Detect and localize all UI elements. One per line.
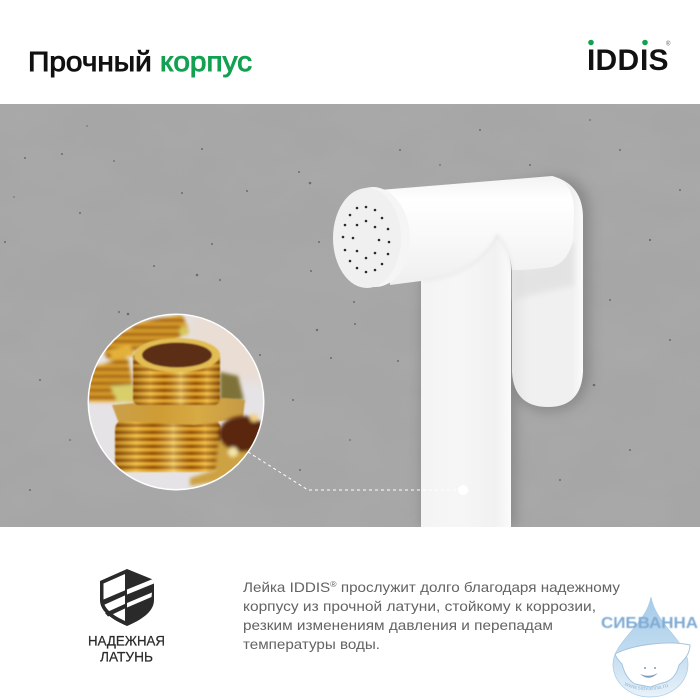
plate shade under head (511, 247, 573, 300)
hex nut (112, 398, 245, 425)
brass fitting inset (85, 310, 270, 495)
icon caption (88, 632, 165, 664)
icon: shield (100, 569, 154, 626)
lower thread (115, 418, 221, 472)
cylinder head (380, 176, 574, 285)
watermark: СИБВАННА (601, 597, 698, 698)
description text: прослужит долго благодаря надежному (337, 579, 620, 595)
pipe rim (134, 338, 220, 372)
description text: Лейка IDDIS (243, 579, 323, 595)
concrete wall photo (0, 104, 700, 527)
title: Прочный корпус (28, 46, 252, 77)
icon caption: НАДЕЖНАЯ (88, 632, 165, 648)
description text: резким изменениям давления и перепадам (243, 617, 553, 633)
upper thread (133, 352, 220, 405)
water drop (613, 597, 688, 697)
logo: IDDIS: IDDIS (587, 44, 669, 77)
product shadow (421, 176, 590, 527)
description text: ® (330, 580, 337, 589)
header band (0, 0, 700, 104)
spray holes (342, 206, 390, 273)
product: white hygienic shower (333, 176, 583, 527)
wall plate (512, 176, 583, 407)
description text: температуры воды. (243, 636, 380, 652)
handle stem (421, 234, 511, 527)
icon caption: ЛАТУНЬ (100, 648, 153, 664)
description text: корпусу из прочной латуни, стойкому к коррозии, (243, 598, 596, 614)
logo: IDDIS: ® (666, 40, 671, 48)
head underside seam (510, 260, 512, 271)
watermark url: www.sibvanna.ru (624, 682, 668, 690)
callout dot (458, 485, 468, 495)
pipe opening (142, 342, 212, 368)
head outer rim (364, 187, 403, 287)
description text (243, 579, 620, 652)
bathtub (615, 643, 690, 687)
spray face (333, 188, 374, 288)
tub face (640, 667, 658, 678)
callout leader line (248, 452, 463, 490)
watermark name: СИБВАННА (601, 615, 698, 632)
